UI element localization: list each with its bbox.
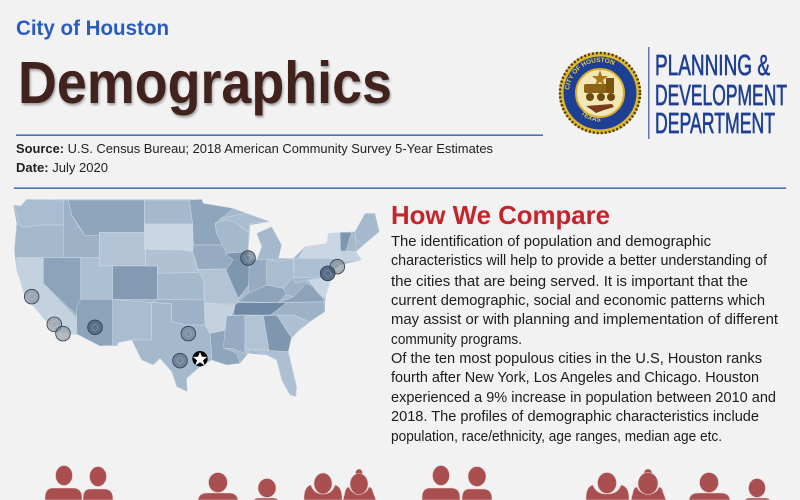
heading: How We Compare: How We Compare <box>391 200 610 230</box>
title: Demographics: Demographics <box>18 50 392 116</box>
body text: current demographic, social and economic patterns which <box>391 293 765 309</box>
source and date <box>16 141 493 175</box>
map: United States with compared cities <box>13 199 379 397</box>
body text: 2018. The profiles of demographic characteristics include <box>391 409 759 425</box>
icon: City of Houston seal: TEXAS <box>582 110 600 122</box>
body text: community programs. <box>391 332 522 348</box>
icon: City of Houston seal <box>558 52 642 134</box>
body text: characteristics will help to provide a better understanding of <box>391 253 768 269</box>
body text: the cities that are being served. It is important that the <box>391 274 748 290</box>
department name <box>655 50 787 140</box>
body text: fourth after New York, Los Angeles and Chicago. Houston <box>391 370 759 386</box>
body text: Of the ten most populous cities in the U.S, Houston ranks <box>391 351 762 367</box>
icon: Houston star <box>192 351 208 366</box>
body text: experienced a 9% increase in population between 2010 and <box>391 390 776 406</box>
source and date: Date: July 2020 <box>16 160 108 175</box>
body text <box>391 234 778 445</box>
body text: The identification of population and demographic <box>391 234 711 250</box>
icons: people row <box>45 466 770 500</box>
city markers <box>24 251 345 368</box>
body text: may assist or with planning and implementation of different <box>391 312 778 328</box>
body text: population, race/ethnicity, age ranges, median age etc. <box>391 429 722 445</box>
subtitle: City of Houston: City of Houston <box>16 17 169 40</box>
source and date: Source: U.S. Census Bureau; 2018 American Community Survey 5-Year Estimates <box>16 141 493 156</box>
icon: City of Houston seal: CITY OF HOUSTON <box>564 58 615 90</box>
